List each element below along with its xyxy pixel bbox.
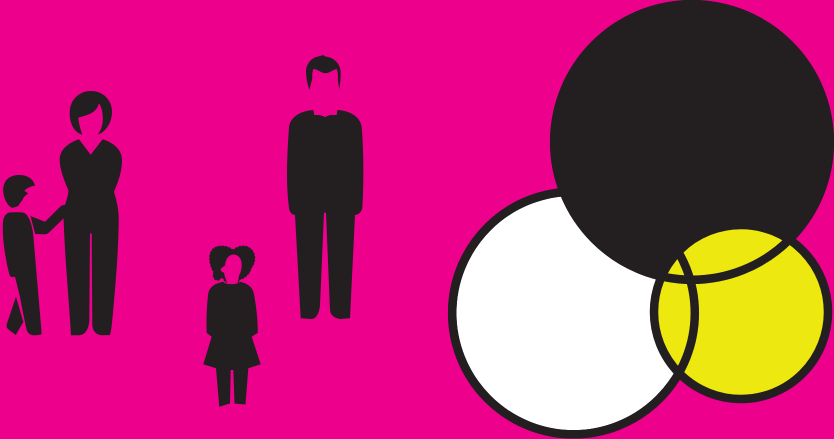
man body [287, 110, 363, 319]
woman hair [70, 91, 112, 134]
boy hair [3, 175, 35, 208]
girl hair [210, 246, 254, 282]
figure: girl [203, 246, 261, 407]
woman body [60, 139, 122, 335]
black circle [550, 0, 834, 284]
girl body [203, 282, 261, 407]
white circle [452, 192, 695, 434]
yellow circle [654, 225, 828, 399]
woman face [78, 103, 103, 135]
figure: woman [60, 91, 122, 335]
venn diagram [452, 0, 834, 434]
figure: man [287, 55, 363, 319]
boy back leg [7, 297, 23, 335]
figure: boy [3, 175, 66, 335]
boy body [3, 212, 42, 335]
black circle outline over yellow [554, 4, 830, 280]
man hair [306, 55, 341, 90]
boy arm [30, 205, 66, 234]
white circle outline over yellow [452, 192, 695, 434]
girl face [220, 254, 242, 284]
